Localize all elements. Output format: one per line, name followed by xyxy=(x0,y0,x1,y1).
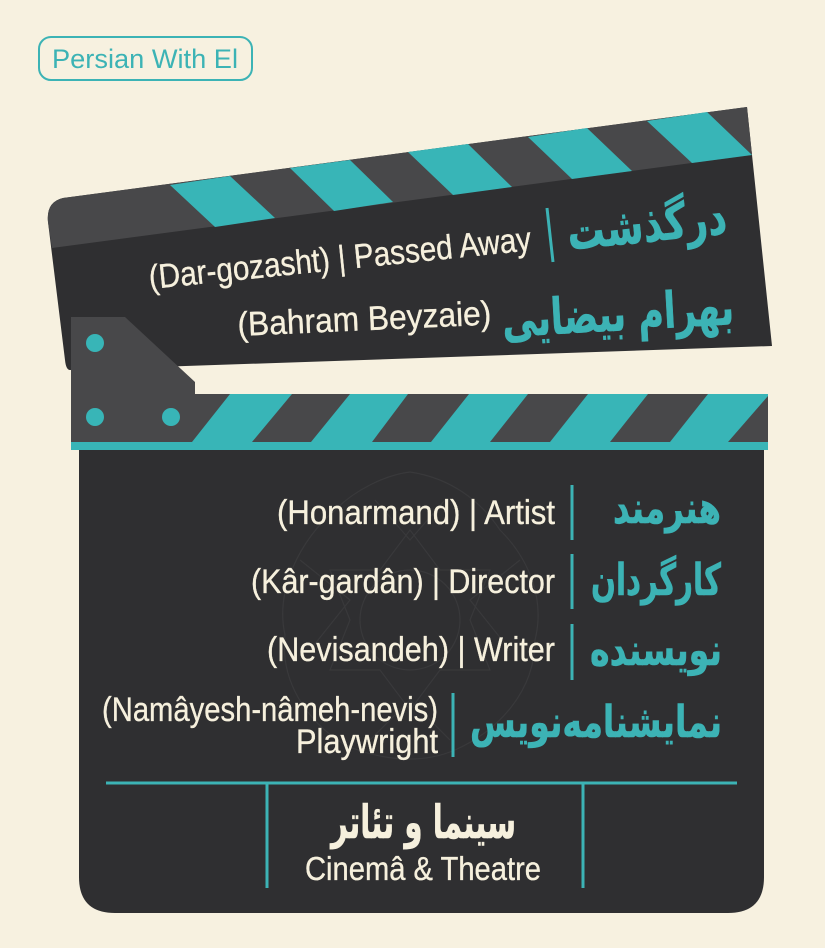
row: Playwright: نمایشنامه‌نویس xyxy=(470,697,722,748)
striped band on top arm xyxy=(48,107,752,248)
row: Playwright xyxy=(102,691,722,761)
row: Director: کارگردان xyxy=(591,554,721,606)
badge: Persian With El: Persian With El xyxy=(52,44,238,74)
row: Playwright: Playwright xyxy=(296,723,438,761)
panel: clapper body xyxy=(79,450,764,913)
panel: clapper top arm xyxy=(48,107,772,370)
row: Artist: هنرمند xyxy=(613,483,721,534)
heading: Bahram Beyzaie: (Bahram Beyzaie) xyxy=(237,295,492,344)
badge: Persian With El xyxy=(39,37,252,80)
footer: Cinema and Theatre: Cinemâ & Theatre xyxy=(305,850,541,887)
heading: Passed Away: (Dar-gozasht) | Passed Away xyxy=(147,220,533,297)
row: Writer: (Nevisandeh) | Writer xyxy=(267,631,555,669)
heading: Bahram Beyzaie xyxy=(237,278,735,350)
footer: Cinema and Theatre xyxy=(305,795,541,887)
row: Writer: نویسنده xyxy=(590,625,722,676)
row: Director: (Kâr-gardân) | Director xyxy=(251,563,555,601)
row: Writer xyxy=(267,624,722,680)
row: Playwright: (Namâyesh-nâmeh-nevis) xyxy=(102,691,438,729)
icon: hinge rivets xyxy=(86,334,180,426)
footer table lines xyxy=(106,783,737,888)
watermark: geometric rosette xyxy=(283,472,538,759)
panel: lower striped bar with hinge xyxy=(71,317,768,450)
row: Artist xyxy=(277,483,721,540)
heading: Bahram Beyzaie: بهرام بیضایی xyxy=(500,278,735,350)
heading: Passed Away xyxy=(147,188,729,297)
row: Director xyxy=(251,554,721,609)
row: Artist: (Honarmand) | Artist xyxy=(277,494,556,532)
heading: Passed Away: درگذشت xyxy=(564,188,729,262)
footer: Cinema and Theatre: سینما و تئاتر xyxy=(330,795,516,849)
